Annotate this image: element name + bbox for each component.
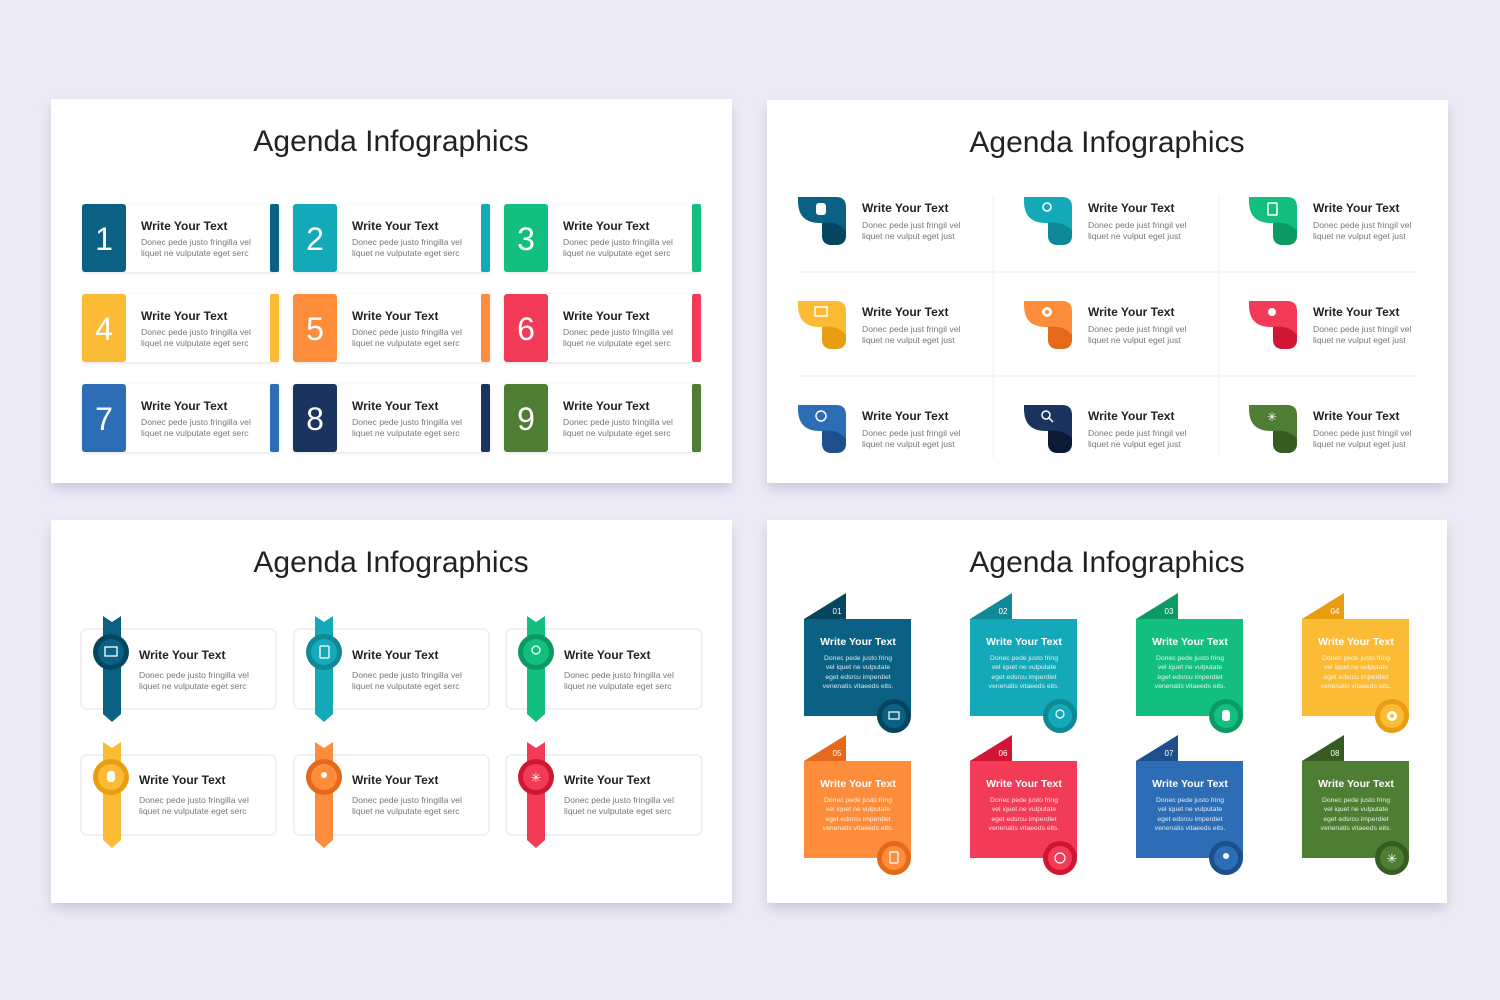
tab card 05: vel iquet ne vulputate: [826, 806, 890, 813]
tab card 06: Donec pede justo fring: [990, 797, 1058, 804]
tab card 02: [970, 593, 1077, 733]
card 6: [504, 294, 701, 362]
tab card 03: vel iquet ne vulputate: [1158, 664, 1222, 671]
item 1: Donec pede just fringil vel: [862, 220, 960, 230]
tab card 04: Write Your Text: [1318, 636, 1394, 648]
ribbon card 1: [81, 616, 276, 722]
ribbon card 1: liquet ne vulputate eget serc: [139, 681, 247, 691]
ribbon card 1: Write Your Text: [139, 648, 225, 662]
card 6: Write Your Text: [563, 309, 649, 323]
tab card 04: Donec pede justo fring: [1322, 655, 1390, 662]
tab card 08: venenatis vitaeeds eits.: [1321, 825, 1391, 832]
panel: tab cards agenda: [767, 520, 1447, 903]
card 3: liquet ne vulputate eget serc: [563, 248, 671, 258]
tab card 02: vel iquet ne vulputate: [992, 664, 1056, 671]
ribbon card 4: [81, 742, 276, 848]
card 6: Donec pede justo fringilla vel: [563, 327, 673, 337]
tab card 03: Donec pede justo fring: [1156, 655, 1224, 662]
item 9: liquet ne vulput eget just: [1313, 439, 1406, 449]
panel: ribbon agenda: [51, 520, 732, 903]
ribbon card 3: Donec pede justo fringilla vel: [564, 670, 674, 680]
item 9: ✳: [1267, 410, 1277, 424]
card 4: Write Your Text: [141, 309, 227, 323]
tab card 04: eget edsrcu imperdiet: [1323, 674, 1389, 681]
card 2: Write Your Text: [352, 219, 438, 233]
ribbon card 6: ✳: [531, 770, 542, 785]
ribbon card 5: liquet ne vulputate eget serc: [352, 806, 460, 816]
tab card 04: [1302, 593, 1409, 733]
card 5: Write Your Text: [352, 309, 438, 323]
card 2: 2: [306, 221, 324, 257]
tab card 07: Write Your Text: [1152, 778, 1228, 790]
item 4: liquet ne vulput eget just: [862, 335, 955, 345]
card 5: Donec pede justo fringilla vel: [352, 327, 462, 337]
card 7: Write Your Text: [141, 399, 227, 413]
card 1: liquet ne vulputate eget serc: [141, 248, 249, 258]
tab card 04: venenatis vitaeeds eits.: [1321, 683, 1391, 690]
card 5: 5: [306, 311, 324, 347]
item 5: Donec pede just fringil vel: [1088, 324, 1186, 334]
card 7: Donec pede justo fringilla vel: [141, 417, 251, 427]
card 9: Write Your Text: [563, 399, 649, 413]
tab card 01: eget edsrcu imperdiet: [825, 674, 891, 681]
ribbon card 3: Write Your Text: [564, 648, 650, 662]
item 7: liquet ne vulput eget just: [862, 439, 955, 449]
item 7: Write Your Text: [862, 409, 948, 423]
item 7: Donec pede just fringil vel: [862, 428, 960, 438]
tab card 07: eget edsrcu imperdiet: [1157, 816, 1223, 823]
panel: leaf icon agenda: [767, 100, 1448, 483]
item 2: Donec pede just fringil vel: [1088, 220, 1186, 230]
card 8: Write Your Text: [352, 399, 438, 413]
card 6: liquet ne vulputate eget serc: [563, 338, 671, 348]
tab card 07: venenatis vitaeeds eits.: [1155, 825, 1225, 832]
ribbon card 6: [506, 742, 702, 848]
item 1: [798, 197, 960, 245]
item 4: Write Your Text: [862, 305, 948, 319]
tab card 01: Donec pede justo fring: [824, 655, 892, 662]
card 4: 4: [95, 311, 113, 347]
card 1: Donec pede justo fringilla vel: [141, 237, 251, 247]
tab card 06: 06: [999, 749, 1008, 758]
item 6: [1249, 301, 1411, 349]
ribbon card 3: liquet ne vulputate eget serc: [564, 681, 672, 691]
title: Agenda Infographics: [969, 126, 1245, 159]
item 5: Write Your Text: [1088, 305, 1174, 319]
tab card 05: 05: [833, 749, 842, 758]
tab card 08: Donec pede justo fring: [1322, 797, 1390, 804]
ribbon card 6: Write Your Text: [564, 773, 650, 787]
tab card 07: vel iquet ne vulputate: [1158, 806, 1222, 813]
title: Agenda Infographics: [253, 546, 529, 579]
tab card 05: Write Your Text: [820, 778, 896, 790]
ribbon card 5: Donec pede justo fringilla vel: [352, 795, 462, 805]
card 9: liquet ne vulputate eget serc: [563, 428, 671, 438]
tab card 02: 02: [999, 607, 1008, 616]
item 2: Write Your Text: [1088, 201, 1174, 215]
tab card 06: [970, 735, 1077, 875]
card 2: [293, 204, 490, 272]
ribbon card 1: Donec pede justo fringilla vel: [139, 670, 249, 680]
item 9: Write Your Text: [1313, 409, 1399, 423]
tab card 02: eget edsrcu imperdiet: [991, 674, 1057, 681]
ribbon card 6: liquet ne vulputate eget serc: [564, 806, 672, 816]
tab card 01: Write Your Text: [820, 636, 896, 648]
card 8: Donec pede justo fringilla vel: [352, 417, 462, 427]
tab card 03: eget edsrcu imperdiet: [1157, 674, 1223, 681]
item 5: liquet ne vulput eget just: [1088, 335, 1181, 345]
item 3: liquet ne vulput eget just: [1313, 231, 1406, 241]
tab card 04: 04: [1331, 607, 1340, 616]
item 7: [798, 405, 960, 453]
ribbon card 2: Donec pede justo fringilla vel: [352, 670, 462, 680]
item 5: [1024, 301, 1186, 349]
card 1: 1: [95, 221, 113, 257]
item 9: Donec pede just fringil vel: [1313, 428, 1411, 438]
card 3: Write Your Text: [563, 219, 649, 233]
panel: numbered agenda: [51, 99, 732, 483]
tab card 07: 07: [1165, 749, 1174, 758]
tab card 03: venenatis vitaeeds eits.: [1155, 683, 1225, 690]
ribbon card 4: Write Your Text: [139, 773, 225, 787]
tab card 08: 08: [1331, 749, 1340, 758]
card 5: [293, 294, 490, 362]
tab card 03: Write Your Text: [1152, 636, 1228, 648]
tab card 03: 03: [1165, 607, 1174, 616]
card 7: liquet ne vulputate eget serc: [141, 428, 249, 438]
card 5: liquet ne vulputate eget serc: [352, 338, 460, 348]
tab card 08: ✳: [1387, 851, 1398, 866]
item 3: Write Your Text: [1313, 201, 1399, 215]
tab card 08: eget edsrcu imperdiet: [1323, 816, 1389, 823]
title: Agenda Infographics: [253, 125, 529, 158]
card 4: liquet ne vulputate eget serc: [141, 338, 249, 348]
card 4: Donec pede justo fringilla vel: [141, 327, 251, 337]
card 7: 7: [95, 401, 113, 437]
tab card 06: eget edsrcu imperdiet: [991, 816, 1057, 823]
item 1: Write Your Text: [862, 201, 948, 215]
tab card 07: Donec pede justo fring: [1156, 797, 1224, 804]
item 3: Donec pede just fringil vel: [1313, 220, 1411, 230]
item 1: liquet ne vulput eget just: [862, 231, 955, 241]
ribbon card 2: liquet ne vulputate eget serc: [352, 681, 460, 691]
tab card 01: vel iquet ne vulputate: [826, 664, 890, 671]
card 8: liquet ne vulputate eget serc: [352, 428, 460, 438]
ribbon card 5: Write Your Text: [352, 773, 438, 787]
ribbon card 4: liquet ne vulputate eget serc: [139, 806, 247, 816]
tab card 08: vel iquet ne vulputate: [1324, 806, 1388, 813]
card 2: liquet ne vulputate eget serc: [352, 248, 460, 258]
card 9: [504, 384, 701, 452]
card 9: 9: [517, 401, 535, 437]
card 3: 3: [517, 221, 535, 257]
tab card 05: eget edsrcu imperdiet: [825, 816, 891, 823]
card 7: [82, 384, 279, 452]
tab card 05: [804, 735, 911, 875]
card 3: Donec pede justo fringilla vel: [563, 237, 673, 247]
tab card 02: Write Your Text: [986, 636, 1062, 648]
tab card 06: venenatis vitaeeds eits.: [989, 825, 1059, 832]
card 3: [504, 204, 701, 272]
item 4: Donec pede just fringil vel: [862, 324, 960, 334]
tab card 06: vel iquet ne vulputate: [992, 806, 1056, 813]
item 2: [1024, 197, 1186, 245]
tab card 05: Donec pede justo fring: [824, 797, 892, 804]
item 8: liquet ne vulput eget just: [1088, 439, 1181, 449]
item 6: Write Your Text: [1313, 305, 1399, 319]
item 3: [1249, 197, 1411, 245]
card 8: 8: [306, 401, 324, 437]
card 4: [82, 294, 279, 362]
item 2: liquet ne vulput eget just: [1088, 231, 1181, 241]
ribbon card 6: Donec pede justo fringilla vel: [564, 795, 674, 805]
tab card 06: Write Your Text: [986, 778, 1062, 790]
item 9: [1249, 405, 1411, 453]
item 8: [1024, 405, 1186, 453]
item 6: liquet ne vulput eget just: [1313, 335, 1406, 345]
card 9: Donec pede justo fringilla vel: [563, 417, 673, 427]
ribbon card 4: Donec pede justo fringilla vel: [139, 795, 249, 805]
tab card 08: Write Your Text: [1318, 778, 1394, 790]
card 1: Write Your Text: [141, 219, 227, 233]
card 1: [82, 204, 279, 272]
tab card 01: venenatis vitaeeds eits.: [823, 683, 893, 690]
tab card 05: venenatis vitaeeds eits.: [823, 825, 893, 832]
item 4: [798, 301, 960, 349]
tab card 03: [1136, 593, 1243, 733]
ribbon card 5: [294, 742, 489, 848]
tab card 08: [1302, 735, 1409, 875]
tab card 02: Donec pede justo fring: [990, 655, 1058, 662]
ribbon card 2: Write Your Text: [352, 648, 438, 662]
item 6: Donec pede just fringil vel: [1313, 324, 1411, 334]
tab card 04: vel iquet ne vulputate: [1324, 664, 1388, 671]
card 2: Donec pede justo fringilla vel: [352, 237, 462, 247]
card 6: 6: [517, 311, 535, 347]
tab card 07: [1136, 735, 1243, 875]
tab card 01: 01: [833, 607, 842, 616]
item 8: Write Your Text: [1088, 409, 1174, 423]
item 8: Donec pede just fringil vel: [1088, 428, 1186, 438]
card 8: [293, 384, 490, 452]
title: Agenda Infographics: [969, 546, 1245, 579]
ribbon card 2: [294, 616, 489, 722]
tab card 01: [804, 593, 911, 733]
ribbon card 3: [506, 616, 702, 722]
tab card 02: venenatis vitaeeds eits.: [989, 683, 1059, 690]
